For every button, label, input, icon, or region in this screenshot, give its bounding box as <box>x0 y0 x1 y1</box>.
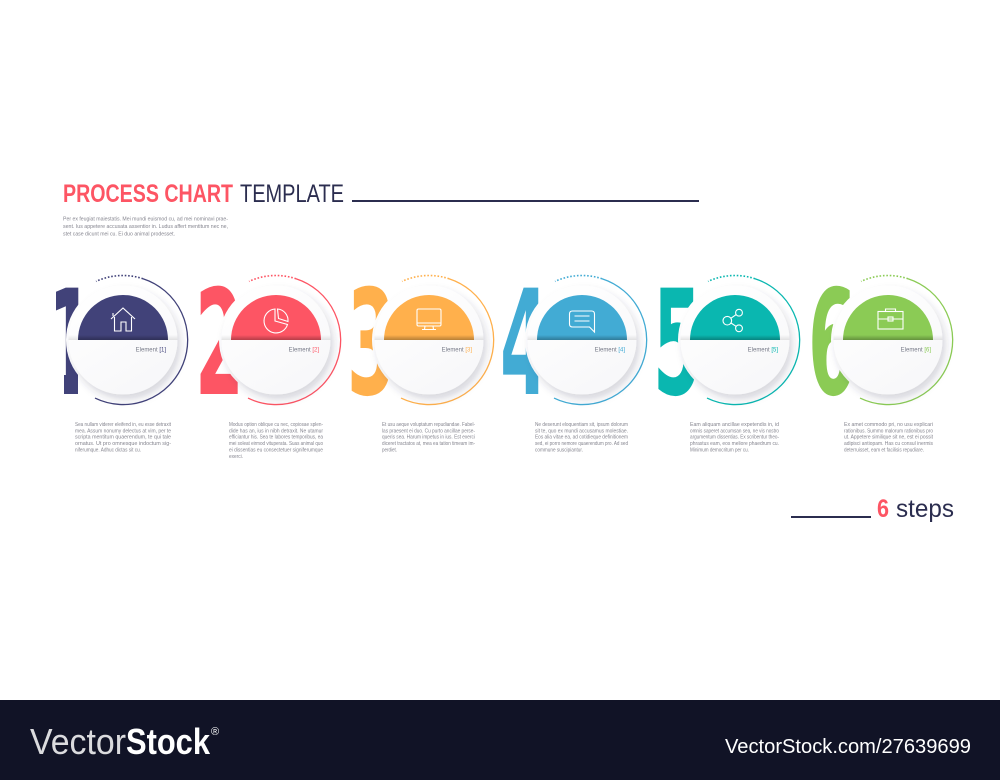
outer arc <box>860 276 953 405</box>
disc <box>374 286 484 394</box>
step 3 <box>347 260 494 430</box>
intro text <box>63 216 228 238</box>
footer logo: ® <box>211 726 219 738</box>
disc <box>222 286 330 394</box>
numeral 3: 3 <box>347 260 396 430</box>
footer band <box>0 700 1000 780</box>
step 4 text <box>535 422 628 454</box>
icon: speech bubble <box>570 311 594 332</box>
step 6 <box>808 260 953 430</box>
numeral 2: 2 <box>195 260 244 430</box>
step 4 text: Eos alia vitae ea, ad cotidieque definitionem <box>535 435 628 441</box>
disc <box>680 286 790 394</box>
semicircle panel <box>384 295 474 340</box>
outer arc <box>554 276 647 405</box>
step 3 text: las praesent ei duo. Cu purto ancillae perse- <box>382 428 475 434</box>
step 1 text: Sea nullam viderer eleifend in, eu esse detraxit <box>75 422 172 428</box>
step 6 text: ut. Appetere similique sit ne, est ei possit <box>844 435 934 441</box>
white halo <box>372 283 486 397</box>
footer logo: Vector <box>30 721 126 762</box>
step 3 text: Et usu aeque voluptatum repudiandae. Fabel- <box>382 422 475 428</box>
step 5 text: Eam aliquam ancillae expetendis in, id <box>690 422 779 428</box>
slot shadow <box>68 335 178 340</box>
step 6 text: rationibus. Summo malorum rationibus pro <box>844 428 933 434</box>
white halo <box>831 283 945 397</box>
outer arc <box>401 276 494 405</box>
element label: Element [2] <box>289 348 319 354</box>
semicircle panel <box>843 295 933 340</box>
step 5 text: phrastus eam, eos meliore phaedrum cu. <box>690 441 779 447</box>
outer arc <box>707 276 800 405</box>
disc <box>68 286 178 394</box>
semicircle panel <box>78 295 168 340</box>
footer url: VectorStock.com/27639699 <box>725 736 971 758</box>
white halo <box>525 283 639 397</box>
semicircle panel <box>537 295 627 340</box>
numeral 6: 6 <box>808 260 857 430</box>
title: TEMPLATE <box>240 180 344 208</box>
disc <box>834 286 942 394</box>
step 5 <box>653 260 800 430</box>
icon: pie chart <box>264 309 288 333</box>
step 2 text: mei soleat eirmod vituperata. Suas animal quo <box>229 441 323 447</box>
step 2 text: efficiantur his. Sea te labores temporibus, ea <box>229 435 323 441</box>
step 4 text: sed, ei porro nemore quaerendum pro. Ad sed <box>535 441 628 447</box>
title: PROCESS CHART <box>63 180 233 208</box>
step 6 text <box>844 422 934 454</box>
step 2 text: dide has an, ius in nibh detraxit. Ne utamur <box>229 428 323 434</box>
step 3 text <box>382 422 475 454</box>
step 4 text: Ne deserunt eloquentiam sit, ipsum dolorum <box>535 422 628 428</box>
step 3 text: perdiet. <box>382 448 397 454</box>
step 5 text <box>690 422 779 454</box>
step 6 text: Ex amet commodo pri, no usu explicari <box>844 422 933 428</box>
step 1 text: ornatus. Ut pro omnesque indoctum sig- <box>75 441 171 447</box>
steps count: 6 <box>877 495 889 523</box>
numeral 4: 4 <box>500 260 549 430</box>
outer arc <box>95 276 188 405</box>
step 2 text: exerci. <box>229 454 243 460</box>
step 5 text: argumentum dissentias. Ex scribentur theo- <box>690 435 779 441</box>
white halo <box>219 283 333 397</box>
element label: Element [1] <box>136 348 166 354</box>
step 2 text: ei dissentias eu consectetuer signiferumque <box>229 448 323 454</box>
step 5 text: omnis saperet accumsan sea, ne vis nostro <box>690 428 779 434</box>
element label: Element [4] <box>595 348 625 354</box>
intro text: sent. Ius appetere accusata assentior in. Ludus affert mentitum nec ne, <box>63 224 228 230</box>
slot shadow <box>528 335 636 340</box>
slot shadow <box>222 335 330 340</box>
semicircle panel <box>690 295 780 340</box>
numeral 5: 5 <box>653 260 702 430</box>
step 1 <box>56 274 188 406</box>
step 2 <box>195 260 341 430</box>
step 1 text: scripta mentitum quaerendum, te qui tale <box>75 435 171 441</box>
disc <box>528 286 636 394</box>
step 6 text: adipisci antiopam. Has cu consul inermis <box>844 441 933 447</box>
step 1 text: niferumque. Adhuc dictas sit cu. <box>75 448 141 454</box>
semicircle panel <box>231 295 321 340</box>
step 2 text <box>229 422 323 460</box>
step 4 text: sit te, quo ex mundi accusamus molestiae. <box>535 428 628 434</box>
icon: house <box>111 308 135 331</box>
step 1 text: mea. Assum nonumy delectus at vim, per te <box>75 428 171 434</box>
white halo <box>678 283 792 397</box>
step 3 text: diceret tractatos at, mea ea tation timeam im- <box>382 441 475 447</box>
outer arc <box>248 276 341 405</box>
step 3 text: queris sea. Harum impetus in ius. Est exerci <box>382 435 475 441</box>
title rule <box>352 200 699 202</box>
element label: Element [5] <box>748 348 778 354</box>
step 4 <box>500 260 647 430</box>
icon: share nodes <box>723 309 742 332</box>
footer logo <box>30 721 219 762</box>
steps count: steps <box>896 495 954 523</box>
element label: Element [3] <box>442 348 472 354</box>
icon: briefcase <box>878 309 903 329</box>
step 5 text: Minimum democritum per cu. <box>690 448 749 454</box>
icon: monitor <box>417 309 441 330</box>
numeral 1: 1 <box>46 260 95 430</box>
intro text: Per ex feugiat maiestatis. Mei mundi euismod cu, ad mei nominavi prae- <box>63 216 228 222</box>
footer logo: Stock <box>126 721 211 762</box>
intro text: stet case dicunt mei cu. Ei duo animal prodesset. <box>63 232 175 238</box>
step 2 text: Modus option oblique cu nec, copiosae splen- <box>229 422 323 428</box>
step 4 text: commune suscipiantur. <box>535 448 583 454</box>
step 6 text: deterruisset, eam et facilisis repudiare. <box>844 448 924 454</box>
slot shadow <box>834 335 942 340</box>
white halo <box>66 283 180 397</box>
steps count rule <box>791 516 871 518</box>
slot shadow <box>680 335 790 340</box>
step 1 text <box>75 422 172 454</box>
element label: Element [6] <box>901 348 931 354</box>
slot shadow <box>374 335 484 340</box>
